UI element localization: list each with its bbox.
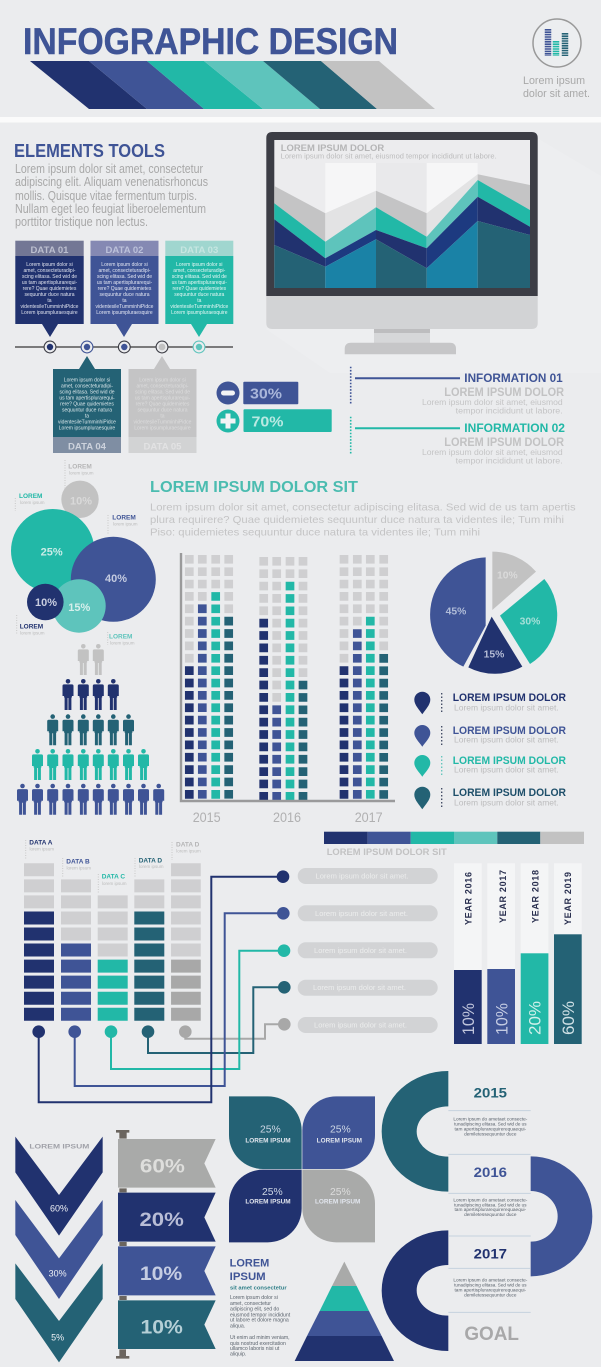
panel: elements tools intro: [14, 140, 208, 229]
lorem ipsum text block: amet, consectetur: [230, 1301, 271, 1307]
legend item 1: Lorem ipsum dolor sit amet.: [454, 704, 559, 713]
information 02: tempor incididunt ut labore.: [456, 457, 563, 466]
petal chart: [229, 1096, 375, 1242]
pie chart: 30%: [520, 617, 540, 628]
data 02 box: videntesileTumminhiPidce: [96, 304, 154, 310]
data 05 box: ta: [160, 414, 165, 420]
data 05 box: Lorem ipsumpluraesquire: [134, 426, 191, 432]
lorem ipsum text block: sit amet consectetur: [230, 1285, 287, 1291]
chevrons: 5%: [51, 1333, 64, 1343]
year 2016: Lorem ipsum do ametaet consecte-: [453, 1198, 528, 1203]
year 2018 bar: YEAR 2018: [530, 870, 540, 923]
flag 60 percent: 60%: [140, 1157, 185, 1178]
column group 2017: [344, 555, 384, 799]
data 03 box: DATA 03: [180, 245, 218, 256]
year 2015: [453, 1084, 528, 1136]
legend item 1: LOREM IPSUM DOLOR: [453, 692, 566, 704]
data 01 box: ta: [47, 298, 52, 304]
icon: equalizer badge: [533, 19, 581, 67]
bubble labels: LOREM: [19, 493, 42, 500]
chart: stacked square columns: [181, 553, 395, 825]
year 2019 bar: YEAR 2019: [563, 872, 573, 925]
year 2017: Lorem ipsum do ametaet consecte-: [453, 1278, 528, 1283]
panel: information blocks: [351, 367, 565, 466]
lorem ipsum text block: Ut enim ad minim veniam,: [230, 1335, 290, 1341]
year 2017 bar: YEAR 2017: [498, 870, 508, 923]
curve 2016: [531, 1156, 592, 1276]
data 02 box: sequuntur duce natura: [99, 292, 150, 298]
intro paragraph: mollis. Quisque vitae fermentum turpis.: [15, 189, 197, 203]
panel: monitor with area chart: [266, 132, 601, 373]
lorem ipsum text block: quis nostrud exercitation: [230, 1341, 286, 1347]
title: INFOGRAPHIC DESIGN: [23, 21, 398, 62]
screen background: [274, 140, 530, 288]
data b column: DATA B: [66, 858, 90, 865]
bubble labels: lorem ipsum: [20, 630, 45, 636]
year labels: 2015: [193, 809, 221, 825]
flag 10 percent teal: [118, 1300, 216, 1349]
year 2017 bar: 10%: [492, 1003, 512, 1035]
data a column: [26, 839, 54, 1021]
lorem ipsum text block: [230, 1258, 291, 1358]
bubble labels: LOREM: [112, 514, 136, 522]
column group 2015: [189, 555, 229, 799]
people pyramid: [17, 644, 164, 815]
data 01 box: amet, consecteturadipi-: [24, 268, 76, 274]
bubble labels: lorem ipsum: [110, 640, 135, 646]
lorem ipsum text block: eiusmod tempor incididunt: [230, 1313, 291, 1319]
year 2015: Lorem ipsum do ametaet consecte-: [453, 1117, 528, 1122]
petal chart: 25%: [330, 1125, 351, 1136]
legend item 4: [414, 787, 566, 809]
intro paragraph: Lorem ipsum dolor sit amet, consectetur: [15, 162, 203, 176]
information 01: LOREM IPSUM DOLOR: [444, 387, 565, 399]
label pills: Lorem ipsum dolor sit amet.: [315, 909, 408, 918]
timeline ribbon: [382, 1071, 592, 1351]
bubble labels: lorem ipsum: [113, 522, 138, 526]
data 05 box: scing elitasa. Sed wid de: [135, 390, 190, 396]
data 01 box: scing elitasa. Sed wid de: [22, 274, 77, 280]
striped ribbon: [30, 61, 435, 109]
flag banners: [116, 1130, 216, 1359]
year 2018 bar: [521, 863, 548, 1044]
data 04 box: scing elitasa. Sed wid de: [59, 390, 115, 396]
bubble values: 40%: [105, 573, 127, 585]
flag pole: [116, 1130, 129, 1359]
year 2016: tunadipiscing elitasa. Sed wid de us: [454, 1202, 527, 1207]
bubble values: [35, 496, 127, 614]
year 2017: tam apertisplurarequirerequaequi-: [454, 1287, 527, 1292]
data c column: [98, 874, 127, 1021]
colour legend bar: [324, 832, 584, 858]
data 02 box: Lorem ipsumpluraesquire: [96, 310, 153, 316]
year labels: 2017: [355, 809, 383, 825]
information 01: INFORMATION 01: [464, 373, 563, 385]
data 05 box: Lorem ipsum dolor si: [139, 378, 186, 384]
data b column: [63, 858, 91, 1021]
area chart: [274, 163, 530, 288]
data 01 box: rere? Quae quidemietes: [23, 286, 77, 292]
goal label: GOAL: [464, 1324, 519, 1345]
flag 60 percent: [118, 1139, 216, 1188]
year bars: [454, 863, 582, 1044]
data 04 box: sequuntur duce natura: [62, 408, 112, 414]
monitor body: [266, 132, 538, 296]
data d column: lorem ipsum: [139, 864, 164, 869]
curve 2015: [382, 1071, 448, 1192]
data 02 box: DATA 02: [106, 245, 144, 256]
year 2016 bar: YEAR 2016: [464, 872, 474, 925]
year 2016: [453, 1164, 528, 1217]
icon caption: Lorem ipsum: [523, 75, 585, 87]
data d column: [135, 857, 164, 1021]
year 2015: tunadipiscing elitasa. Sed wid de us: [454, 1121, 527, 1126]
information 01: tempor incididunt ut labore.: [456, 407, 563, 416]
section heading: LOREM IPSUM DOLOR SIT: [150, 479, 359, 496]
bubble values: 10%: [35, 597, 57, 609]
data 01 box: Lorem ipsumpluraesquire: [21, 310, 78, 316]
connector dots: [32, 870, 291, 1038]
lorem ipsum text block: ullamco laboris nisi ut: [230, 1346, 280, 1352]
year 2017: tunadipiscing elitasa. Sed wid de us: [454, 1282, 527, 1287]
intro paragraph: adipiscing elit. Aliquam venenatisrhoncus: [15, 175, 208, 189]
data 04 box: DATA 04: [68, 442, 107, 452]
data a column: DATA A: [29, 839, 53, 846]
gray data d column: [172, 841, 201, 1021]
information 01: [351, 367, 565, 416]
lorem ipsum text block: ut labore et dolore magna: [230, 1318, 289, 1324]
petal chart: LOREM IPSUM: [245, 1198, 291, 1205]
lorem ipsum text block: aliqua.: [230, 1323, 245, 1329]
information 02: [351, 417, 565, 466]
legend item 2: LOREM IPSUM DOLOR: [453, 725, 566, 737]
legend item 4: LOREM IPSUM DOLOR: [453, 787, 566, 799]
petal chart: 25%: [260, 1125, 281, 1136]
year 2016 bar: 10%: [459, 1003, 478, 1035]
legend item 2: [414, 725, 566, 747]
data 03 box: amet, consecteturadipi-: [173, 268, 226, 274]
data 03 box: scing elitasa. Sed wid de: [172, 274, 227, 280]
legend item 1: [414, 692, 566, 714]
label pills: [298, 868, 438, 1033]
bubble labels: lorem ipsum: [69, 470, 94, 476]
lorem ipsum text block: LOREM: [230, 1258, 269, 1270]
gray data d column: lorem ipsum: [176, 849, 201, 854]
label pills: Lorem ipsum dolor sit amet.: [314, 1020, 407, 1030]
year 2018 bar: 20%: [526, 1001, 544, 1035]
section paragraph: plura requirere? Quae quidemietes sequuntur duce natura ta videntes ile; Tum mihi: [150, 514, 564, 526]
lorem ipsum text block: aliquip.: [230, 1352, 246, 1358]
data 04 box: Lorem ipsumpluraesquire: [59, 426, 115, 432]
data 02 box: amet, consecteturadipi-: [99, 268, 151, 274]
monitor chin: [266, 296, 538, 329]
data 05 box: rere? Quae quidemietes: [136, 402, 190, 408]
data 05 box: DATA 05: [144, 442, 182, 452]
lorem ipsum text block: adipiscing elit, sed do: [230, 1307, 279, 1313]
intro paragraph: Nullam eget leo feugiat liberoelementum: [15, 202, 206, 216]
chevrons: 60%: [50, 1204, 68, 1214]
plus icon: [216, 410, 240, 432]
year 2016: demiletessequuntur duce: [464, 1212, 517, 1217]
pie chart: 45%: [446, 607, 466, 618]
legend item 3: [414, 755, 566, 777]
label pills: Lorem ipsum dolor sit amet.: [313, 983, 406, 992]
colour legend bar: LOREM IPSUM DOLOR SIT: [327, 847, 447, 858]
data a column: lorem ipsum: [30, 846, 54, 851]
year 2017 bar: [487, 863, 515, 1044]
information 01: Lorem ipsum dolor sit amet, eiusmod: [422, 398, 563, 407]
lorem ipsum text block: Lorem ipsum dolor si: [230, 1295, 278, 1301]
axes: [181, 553, 395, 801]
petal chart: 25%: [262, 1187, 283, 1198]
data 05 box: us tam apertisplurarequi-: [135, 396, 190, 402]
data 01 box: DATA 01: [30, 245, 69, 256]
label pills: Lorem ipsum dolor sit amet.: [316, 872, 408, 880]
data 02 box: rere? Quae quidemietes: [98, 286, 152, 292]
data c column: lorem ipsum: [102, 881, 127, 886]
year 2016: 2016: [474, 1164, 507, 1180]
70 percent bar: 70%: [252, 414, 284, 430]
section paragraph: Piso: quidemietes sequuntur duce natura ta videntes ile; Tum mihi: [150, 527, 480, 539]
pyramid: [295, 1262, 394, 1361]
year labels: 2016: [273, 809, 301, 825]
monitor stand: [345, 329, 456, 354]
legend item 2: Lorem ipsum dolor sit amet.: [454, 735, 559, 744]
bubbles: [11, 481, 156, 633]
pie chart: 10%: [497, 571, 518, 582]
data 01 box: Lorem ipsum dolor si: [26, 262, 73, 268]
flag 10 percent teal: 10%: [140, 1318, 183, 1339]
year 2016 bar: [454, 863, 482, 1044]
data c column: DATA C: [102, 874, 125, 881]
bubble labels: LOREM: [68, 464, 92, 470]
panel: bubble chart: [11, 460, 156, 646]
data 05 box: videntesileTumminhiPidce: [134, 420, 192, 426]
bubble labels: LOREM: [109, 634, 132, 640]
flag 20 percent: 20%: [139, 1210, 184, 1231]
information 02: INFORMATION 02: [464, 423, 565, 435]
30 percent bar: 30%: [250, 386, 282, 402]
data 04 box: us tam apertisplurarequi-: [59, 396, 115, 402]
gray data d column: DATA D: [176, 841, 200, 848]
panel: data table with connectors: [26, 839, 438, 1102]
legend item 3: LOREM IPSUM DOLOR: [453, 755, 566, 767]
heading: ELEMENTS TOOLS: [14, 140, 165, 161]
lorem ipsum text block: IPSUM: [230, 1271, 266, 1283]
pie legend: [414, 692, 566, 809]
petal chart: LOREM IPSUM: [317, 1137, 362, 1144]
data 03 box: rere? Quae quidemietes: [172, 286, 227, 292]
data 04 box: rere? Quae quidemietes: [60, 402, 114, 408]
screen heading: LOREM IPSUM DOLOR: [281, 143, 384, 154]
data 03 box: Lorem ipsum dolor si: [176, 262, 223, 268]
data d column: DATA D: [139, 857, 162, 864]
chevrons: 30%: [49, 1269, 67, 1279]
bubble values: 15%: [68, 602, 91, 614]
pie chart: [430, 552, 557, 674]
label pills: Lorem ipsum dolor sit amet.: [314, 946, 407, 955]
data 01 box: videntesileTumminhiPidce: [21, 304, 79, 310]
year 2017: demiletessequuntur duce: [464, 1292, 517, 1297]
icon caption: dolor sit amet.: [523, 88, 590, 100]
intro paragraph: porttitor tristique non lectus.: [15, 215, 148, 229]
minus icon: [216, 382, 240, 404]
data 05 box: [128, 356, 196, 453]
data 05 box: amet, consecteturadipi-: [137, 384, 189, 390]
pie chart: 15%: [484, 650, 504, 661]
year 2015: demiletessequuntur duce: [464, 1131, 517, 1136]
timeline line: [15, 346, 233, 348]
year 2015: tam apertisplurarequirerequaequi-: [454, 1126, 527, 1131]
data 03 box: sequuntur duce natura: [174, 292, 225, 298]
data 02 box: scing elitasa. Sed wid de: [97, 274, 152, 280]
information 02: Lorem ipsum dolor sit amet, eiusmod: [422, 448, 563, 457]
timeline nodes: [44, 341, 205, 353]
information 02: LOREM IPSUM DOLOR: [444, 437, 565, 449]
data 04 box: Lorem ipsum dolor si: [64, 378, 110, 384]
section paragraph: Lorem ipsum dolor sit amet, consectetur adipiscing elitasa. Sed wid de us tam apertis: [150, 502, 576, 514]
panel: percentage bars: [216, 382, 332, 432]
bubble labels: lorem ipsum: [20, 500, 45, 505]
screen subtext: Lorem ipsum dolor sit amet, eiusmod tempor incididunt ut labore.: [281, 154, 497, 160]
data 02 box: Lorem ipsum dolor si: [101, 262, 148, 268]
flag 20 percent: [118, 1193, 216, 1242]
petal chart: LOREM IPSUM: [245, 1137, 291, 1144]
data 03 box: us tam apertisplurarequi-: [172, 280, 227, 286]
data 02 box: [90, 241, 158, 337]
bubble values: 10%: [70, 496, 92, 508]
monitor shadow: [266, 138, 601, 373]
legend item 4: Lorem ipsum dolor sit amet.: [454, 799, 559, 808]
legend item 3: Lorem ipsum dolor sit amet.: [454, 766, 559, 775]
year 2015: 2015: [474, 1084, 507, 1100]
flag 10 percent blue: [118, 1246, 216, 1295]
year labels: [193, 809, 383, 825]
year 2017: [453, 1245, 528, 1297]
year 2016: tam apertisplurarequirerequaequi-: [454, 1207, 527, 1212]
header panel: [23, 19, 590, 109]
data 04 box: amet, consecteturadipi-: [61, 384, 113, 390]
bubble values: 25%: [41, 546, 63, 558]
bubble labels: LOREM: [20, 624, 43, 630]
data 04 box: [53, 356, 121, 453]
data 03 box: Lorem ipsumpluraesquire: [171, 310, 228, 316]
data 01 box: sequuntur duce natura: [24, 292, 75, 298]
panel: data timeline: [15, 241, 233, 453]
chevrons: [15, 1137, 103, 1362]
data 02 box: us tam apertisplurarequi-: [97, 280, 152, 286]
connector lines: [39, 877, 284, 1102]
data 02 box: ta: [122, 298, 127, 304]
flag 10 percent blue: 10%: [140, 1264, 182, 1285]
data 03 box: ta: [197, 298, 202, 304]
bubble labels: [15, 460, 138, 646]
column group 2016: [264, 557, 303, 801]
data 01 box: [15, 241, 84, 337]
data 05 box: sequuntur duce natura: [137, 408, 188, 414]
data 03 box: [165, 241, 233, 337]
curve 2017: [382, 1230, 448, 1351]
year 2019 bar: 60%: [559, 1001, 578, 1035]
separators: [448, 1111, 531, 1312]
data 01 box: us tam apertisplurarequi-: [22, 280, 77, 286]
data b column: lorem ipsum: [66, 865, 91, 870]
petal chart: LOREM IPSUM: [315, 1198, 360, 1205]
data 04 box: ta: [85, 414, 89, 420]
data 03 box: videntesileTumminhiPidce: [170, 304, 228, 310]
data 04 box: videntesileTumminhiPidce: [58, 420, 116, 426]
year 2019 bar: [554, 863, 582, 1044]
chevrons: LOREM IPSUM: [29, 1143, 90, 1150]
petal chart: 25%: [330, 1187, 351, 1198]
year 2017: 2017: [474, 1245, 507, 1261]
